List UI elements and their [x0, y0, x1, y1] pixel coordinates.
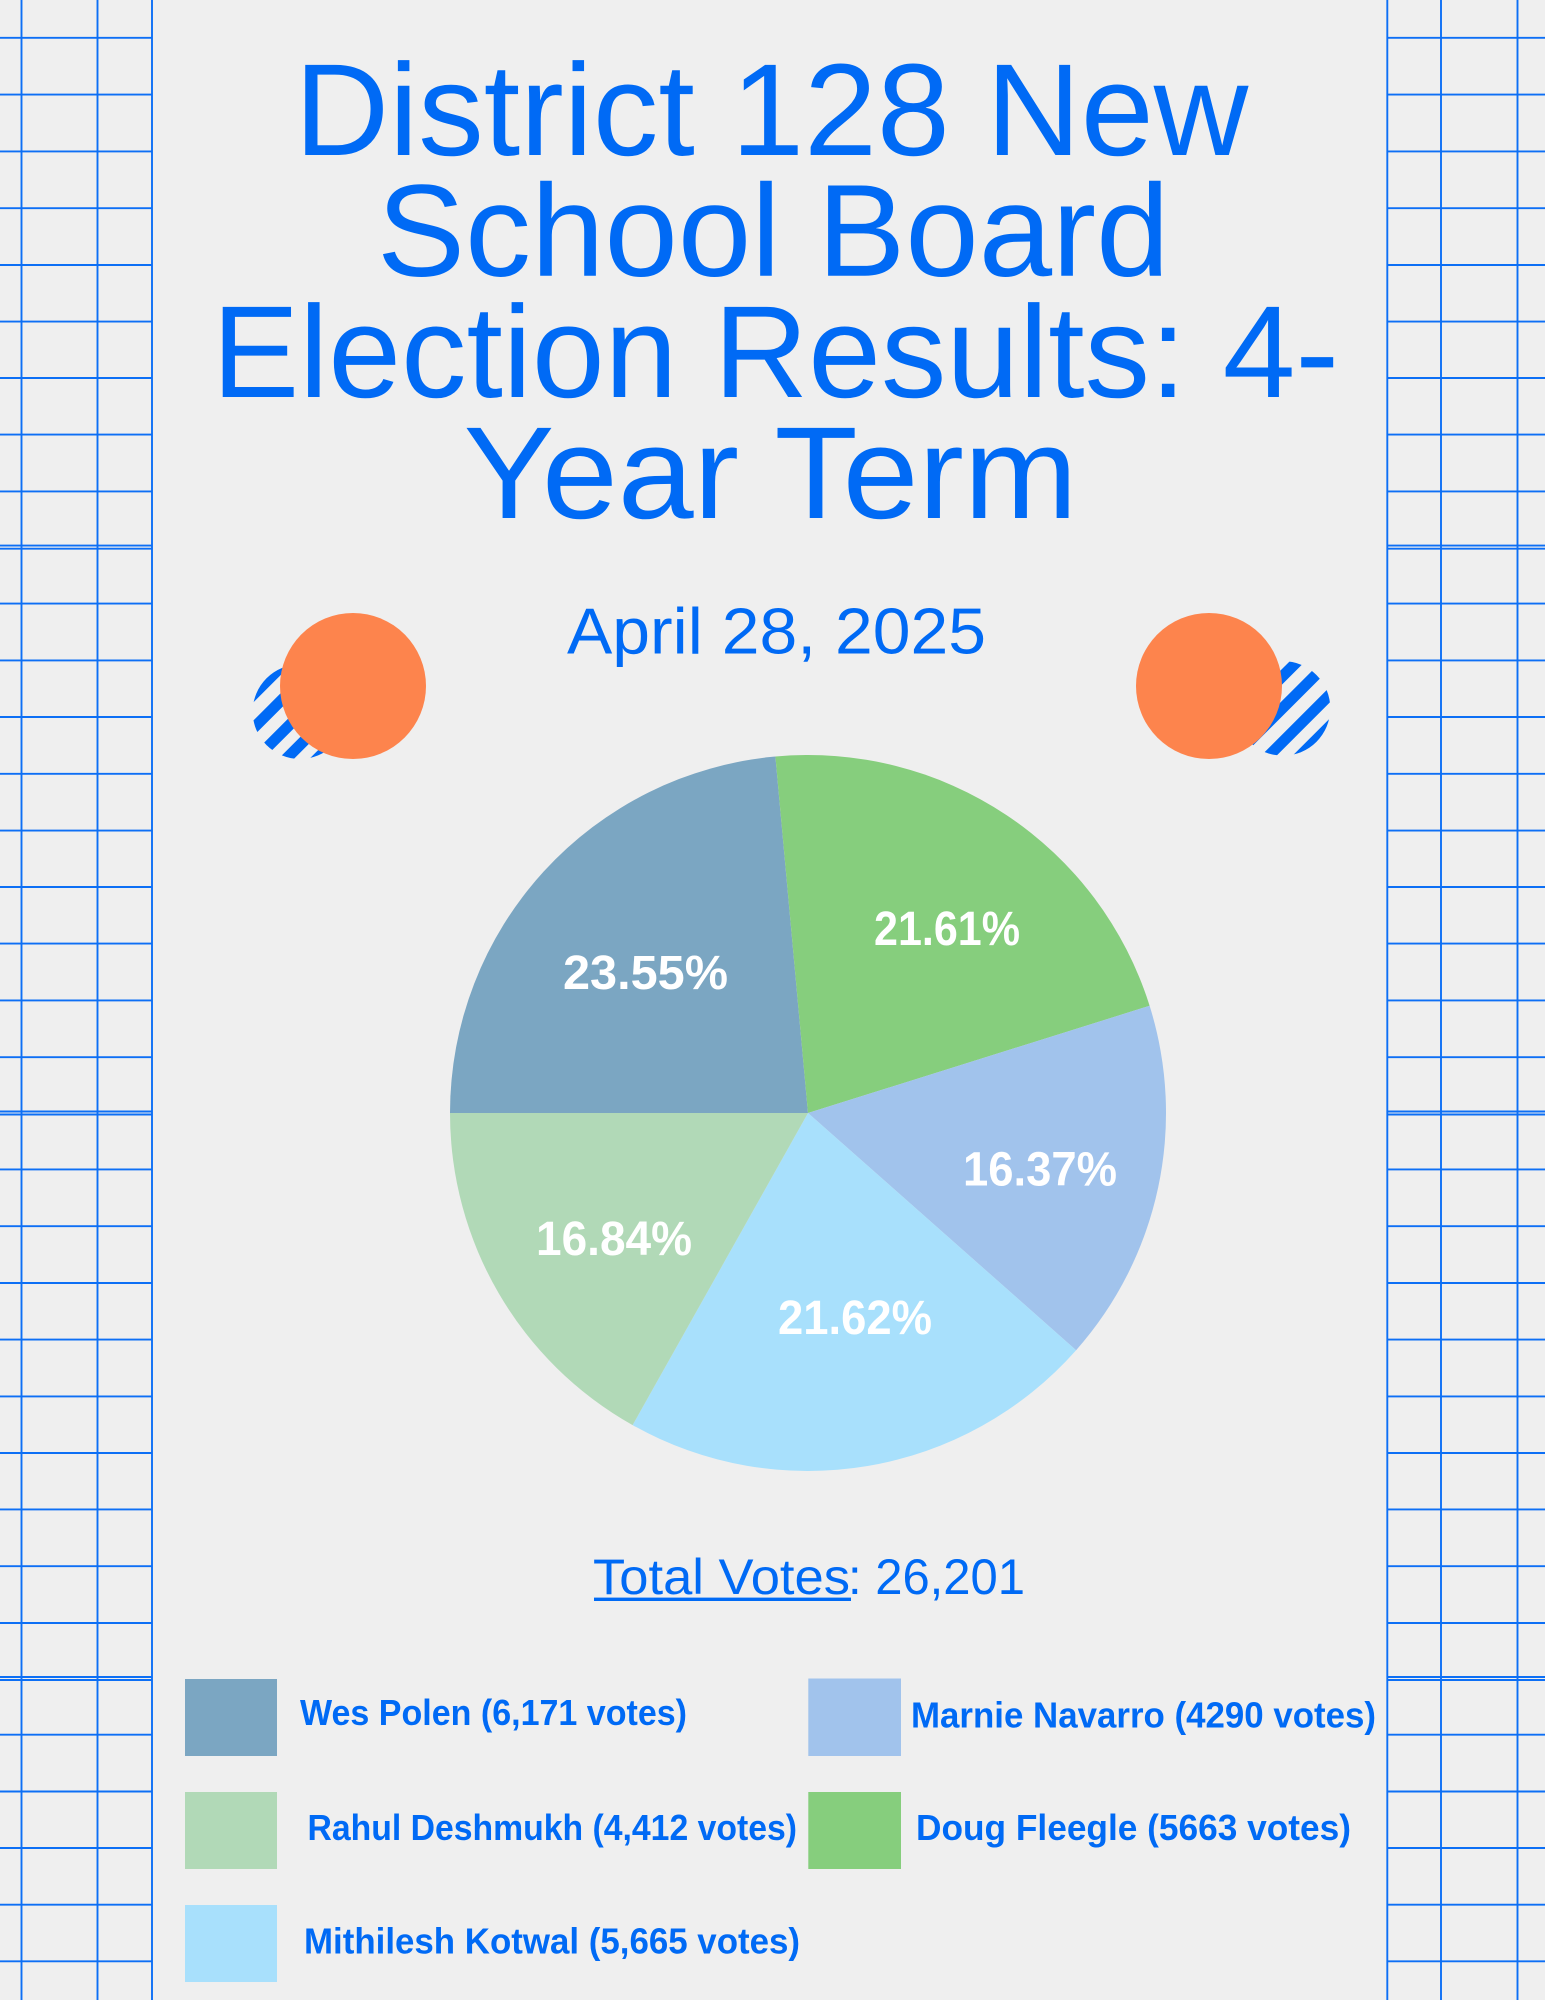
- swatch: Marnie Navarro: [808, 1678, 901, 1756]
- swatch: Doug Fleegle: [808, 1792, 901, 1869]
- slice: Doug Fleegle 21.61%: [775, 755, 1150, 1113]
- swatch: Wes Polen: [185, 1679, 277, 1756]
- legend label: Doug Fleegle: Doug Fleegle (5663 votes): [916, 1807, 1351, 1848]
- slice: Rahul Deshmukh 16.84%: [450, 1113, 808, 1425]
- title: Election Results: 4-: [212, 278, 1339, 425]
- legend: [185, 1678, 1376, 1982]
- legend label: Wes Polen: Wes Polen (6,171 votes): [300, 1692, 687, 1733]
- label: 16.37%: 16.37%: [963, 1144, 1117, 1197]
- legend label: Mithilesh Kotwal: Mithilesh Kotwal (5,665 votes): [304, 1920, 800, 1961]
- legend label: Rahul Deshmukh: Rahul Deshmukh (4,412 votes): [308, 1807, 797, 1848]
- slice: Wes Polen 23.55%: [450, 756, 808, 1113]
- icon: left striped circle with orange circle: [254, 613, 426, 759]
- date subtitle: April 28, 2025: [567, 594, 986, 667]
- total votes: : 26,201: [848, 1549, 1025, 1605]
- title: Year Term: [464, 399, 1078, 546]
- title: District 128 New: [294, 36, 1249, 183]
- legend label: Marnie Navarro: Marnie Navarro (4290 votes): [911, 1695, 1376, 1736]
- icon: right striped circle with orange circle: [1136, 613, 1330, 759]
- title: School Board: [377, 157, 1170, 304]
- pie chart: [450, 755, 1166, 1471]
- total votes: Total Votes: [593, 1549, 850, 1605]
- label: 23.55%: 23.55%: [563, 947, 728, 1000]
- label: 21.61%: 21.61%: [874, 903, 1020, 956]
- slice: Marnie Navarro 16.37%: [808, 1006, 1166, 1350]
- title: [212, 36, 1339, 546]
- slice: Mithilesh Kotwal 21.62%: [633, 1113, 1076, 1471]
- label: 16.84%: 16.84%: [536, 1213, 692, 1266]
- label: 21.62%: 21.62%: [778, 1292, 932, 1345]
- swatch: Mithilesh Kotwal: [185, 1905, 277, 1982]
- total votes: [593, 1549, 1025, 1605]
- swatch: Rahul Deshmukh: [185, 1792, 277, 1869]
